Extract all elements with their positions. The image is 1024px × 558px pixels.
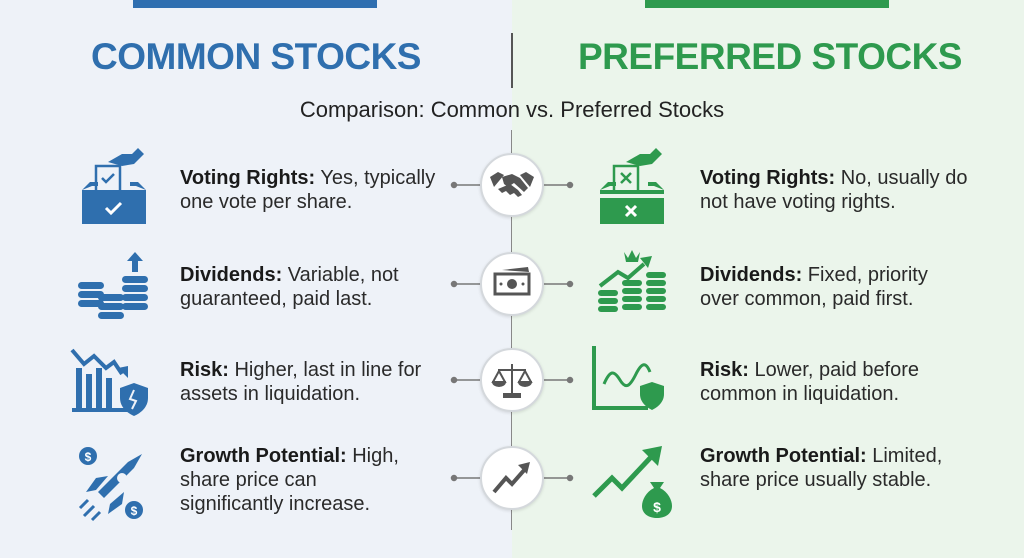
text: risk preferred: common in liquidation.: [700, 383, 899, 405]
text: growth common: [180, 445, 399, 515]
text: growth preferred: share price usually stable.: [700, 469, 931, 491]
icon: coins arrow up: [78, 252, 148, 319]
text: dividends common: [180, 264, 399, 310]
center column connectors: [450, 182, 574, 482]
row: growth left: [79, 445, 399, 521]
icon: banknote: [480, 252, 544, 316]
icon: handshake: [480, 153, 544, 217]
row: risk right: [592, 346, 919, 410]
text: risk common: [180, 359, 421, 405]
icon: trend up: [480, 446, 544, 510]
text: risk preferred: Risk: Lower, paid before: [700, 359, 919, 381]
text: voting common: one vote per share.: [180, 191, 352, 213]
row: dividends right: [598, 250, 928, 312]
text: risk common: Risk: Higher, last in line for: [180, 359, 421, 381]
text: voting common: [180, 167, 436, 213]
icon: rocket with dollars: $: [85, 450, 92, 464]
icon: ballot box x: [600, 148, 664, 224]
text: voting preferred: Voting Rights: No, usually do: [700, 167, 967, 189]
text: growth common: share price can: [180, 469, 317, 491]
subtitle: Comparison: Common vs. Preferred Stocks: [300, 97, 724, 122]
text: dividends common: Dividends: Variable, not: [180, 264, 399, 286]
row: voting left: [82, 148, 436, 224]
text: voting common: Voting Rights: Yes, typically: [180, 167, 435, 189]
text: risk preferred: [700, 359, 919, 405]
text: dividends common: guaranteed, paid last.: [180, 288, 372, 310]
icon: rocket with dollars: [79, 447, 143, 521]
icon: scales: [480, 348, 544, 412]
top bar: green: [645, 0, 889, 8]
icon: growth arrow money bag: $: [653, 499, 661, 515]
text: voting preferred: [700, 167, 967, 213]
icon: rocket with dollars: $: [131, 504, 138, 518]
icon: coins crown trend: [598, 250, 666, 312]
text: dividends preferred: over common, paid first.: [700, 288, 913, 310]
row: growth right: [592, 445, 942, 518]
text: growth preferred: [700, 445, 942, 491]
top bar: blue: [133, 0, 377, 8]
text: dividends preferred: Dividends: Fixed, priority: [700, 264, 928, 286]
title: common stocks: COMMON STOCKS: [91, 36, 421, 77]
text: growth common: Growth Potential: High,: [180, 445, 399, 467]
icon: falling chart shield: [70, 348, 148, 416]
row: risk left: [70, 348, 421, 416]
row: dividends left: [78, 252, 399, 319]
icon: growth arrow money bag: [592, 446, 672, 518]
text: growth common: significantly increase.: [180, 493, 370, 515]
icon: stable chart shield: [592, 346, 664, 410]
text: risk common: assets in liquidation.: [180, 383, 360, 405]
icon: ballot box check: [82, 148, 146, 224]
title: preferred stocks: PREFERRED STOCKS: [578, 36, 962, 77]
text: voting preferred: not have voting rights.: [700, 191, 896, 213]
text: growth preferred: Growth Potential: Limited,: [700, 445, 942, 467]
row: voting right: [600, 148, 967, 224]
text: dividends preferred: [700, 264, 928, 310]
